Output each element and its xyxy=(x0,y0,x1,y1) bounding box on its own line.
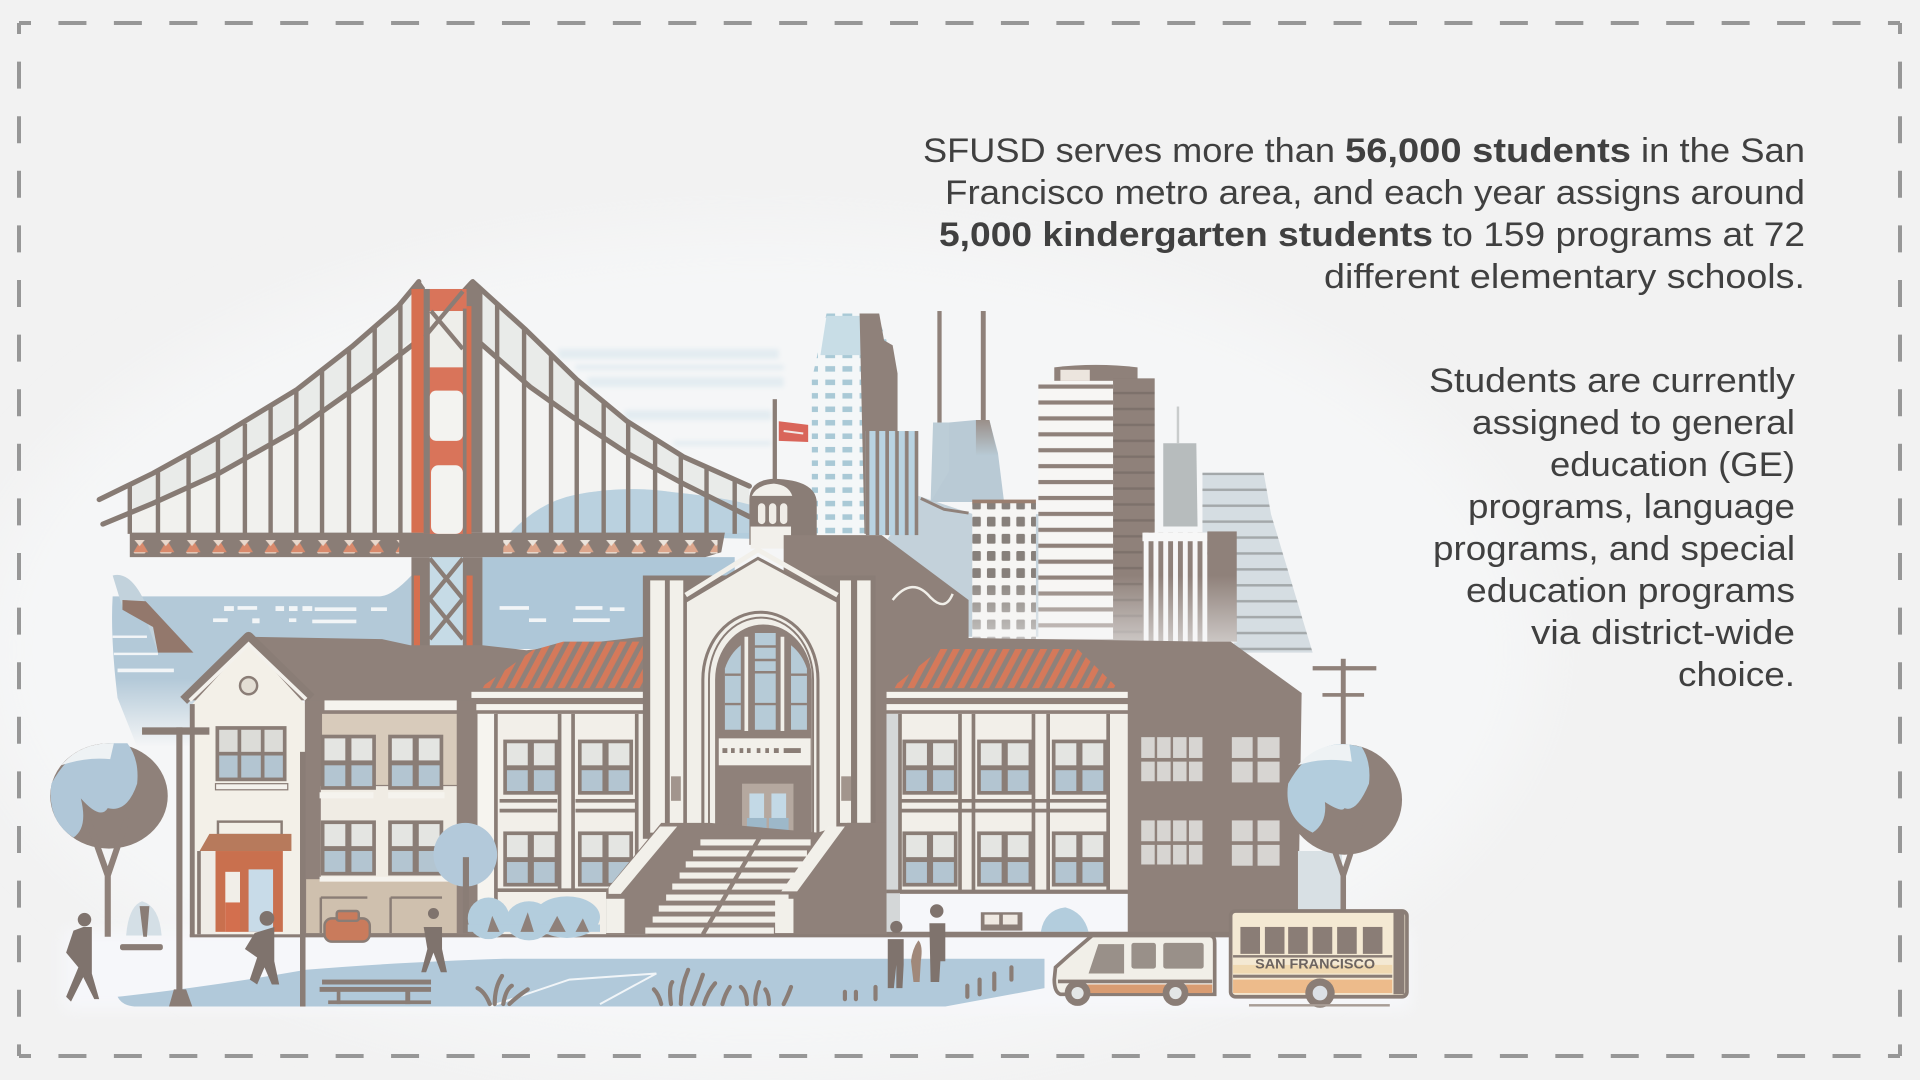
left tree xyxy=(50,743,168,937)
text block: assignment programs: assigned to general xyxy=(1472,404,1795,442)
bay: hill and water xyxy=(112,489,749,747)
sky streaks xyxy=(558,349,784,446)
text block: assignment programs: education programs xyxy=(1466,572,1795,610)
water highlights xyxy=(113,606,624,672)
main cables xyxy=(99,282,749,524)
hangers xyxy=(130,302,735,534)
lamp posts xyxy=(142,727,306,1007)
text block: district overview: 5,000 kindergarten students xyxy=(939,216,1433,254)
bridge panels xyxy=(130,284,413,533)
haze behind towers xyxy=(888,496,1041,637)
lower tower xyxy=(411,557,482,647)
left classroom wing xyxy=(471,692,648,934)
left tiled roof xyxy=(480,642,645,688)
spire towers xyxy=(921,311,1004,513)
arch window xyxy=(703,612,818,833)
text block: district overview: SFUSD serves more than xyxy=(923,132,1335,170)
house window xyxy=(216,726,288,790)
short vertical-strip block xyxy=(1142,531,1237,643)
tan wing xyxy=(305,700,478,934)
text block: district overview xyxy=(923,132,1805,296)
person by bench xyxy=(421,908,447,972)
courtyard xyxy=(900,894,1128,932)
pillars xyxy=(650,580,665,833)
white ground haze xyxy=(64,931,1411,1009)
bench xyxy=(320,980,431,1004)
gabled left house xyxy=(184,637,311,937)
ground xyxy=(118,934,1292,1007)
grass tufts xyxy=(478,967,1011,1004)
pale stepped tower xyxy=(1202,473,1313,653)
grand staircase xyxy=(606,823,887,934)
text block: assignment programs: programs, language xyxy=(1468,488,1795,526)
people xyxy=(66,904,945,1002)
building mass and roofs xyxy=(184,535,1302,936)
text block: assignment programs xyxy=(1429,362,1795,694)
Golden Gate bridge xyxy=(99,279,749,647)
text block: assignment programs: Students are currently xyxy=(1429,362,1795,400)
text block: assignment programs: programs, and special xyxy=(1433,530,1795,568)
right tree xyxy=(1287,744,1402,912)
text block: assignment programs: choice. xyxy=(1678,656,1795,694)
text block: district overview: Francisco metro area, and each year assigns around xyxy=(945,174,1805,212)
bushes xyxy=(468,896,600,940)
gable wall xyxy=(687,560,836,833)
van xyxy=(1054,936,1215,1006)
small tree xyxy=(433,823,497,933)
text block: assignment programs: education (GE) xyxy=(1550,446,1795,484)
entrance canopy and door xyxy=(197,822,291,934)
illustration: San Francisco school scene xyxy=(50,279,1411,1009)
small figure behind lamp xyxy=(120,901,163,950)
bus lettering: SAN FRANCISCO xyxy=(1255,957,1375,972)
deck xyxy=(130,533,725,557)
text block: district overview: to 159 programs at 72 xyxy=(1442,216,1805,254)
text block: district overview: 56,000 students xyxy=(1345,132,1631,170)
person with backpack xyxy=(245,911,279,984)
person walking left xyxy=(66,913,99,1002)
skyline xyxy=(812,311,1313,653)
dark right wing windows xyxy=(1141,737,1280,866)
orange bag xyxy=(324,911,370,942)
tall striped tower xyxy=(1038,365,1155,640)
text block: assignment programs: via district-wide xyxy=(1531,614,1795,652)
right classroom wing xyxy=(887,692,1291,936)
text block: district overview: in the San xyxy=(1641,132,1805,170)
school bus xyxy=(1231,911,1407,1008)
grey tower xyxy=(1163,443,1198,527)
pair near stairs xyxy=(888,904,945,988)
school sign xyxy=(719,738,811,765)
front door xyxy=(742,784,793,833)
tall blue-window tower xyxy=(812,313,918,535)
bridge tower xyxy=(411,279,482,647)
right tiled roof xyxy=(891,649,1118,688)
central entrance xyxy=(643,550,876,839)
utility pole xyxy=(1298,659,1376,912)
flag and cupola xyxy=(749,399,817,549)
windowed block xyxy=(972,500,1036,640)
roof ridge curl xyxy=(893,587,953,604)
text block: district overview: different elementary schools. xyxy=(1324,258,1805,296)
